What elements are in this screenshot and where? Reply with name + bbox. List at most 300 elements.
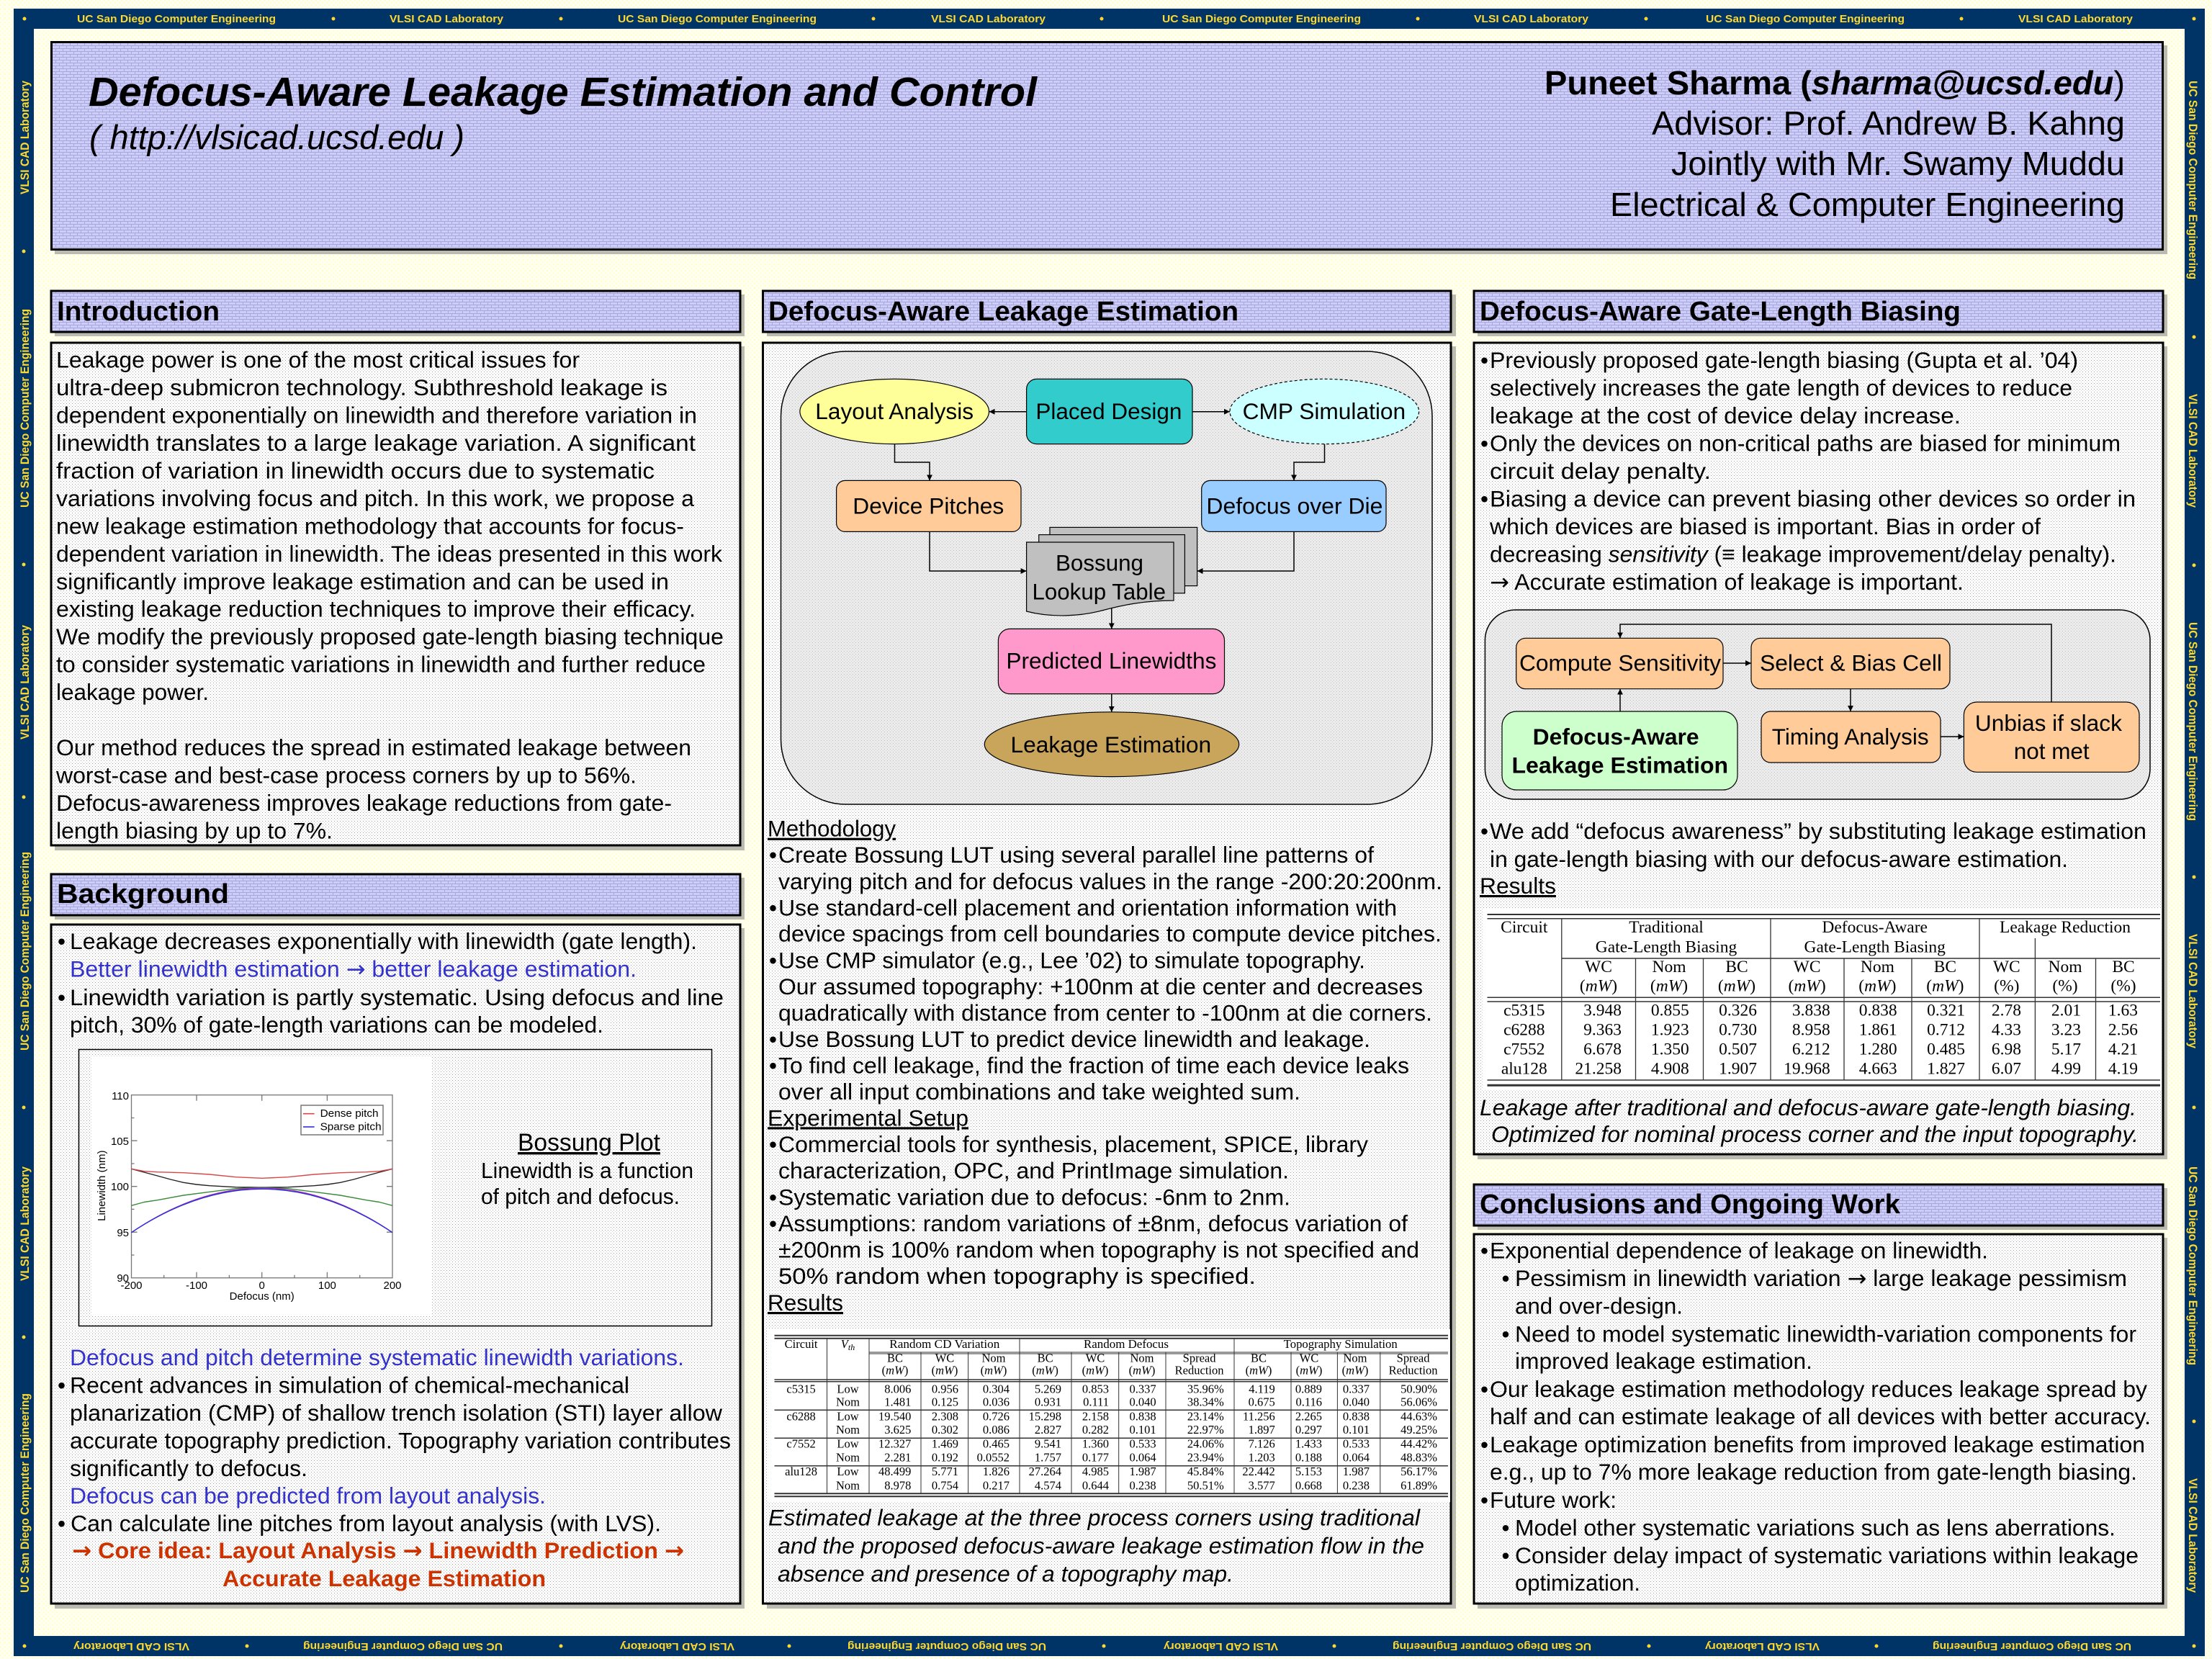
table: estimated leakage at process corners: (mW) <box>981 1363 1007 1377</box>
table: estimated leakage at process corners: Low <box>837 1437 859 1451</box>
table: estimated leakage at process corners: 3.577 <box>1249 1478 1275 1492</box>
table: estimated leakage at process corners: 22.97% <box>1187 1423 1224 1437</box>
flowchart: gate-length biasing loop <box>1485 610 2150 799</box>
panel: title banner <box>52 42 2167 254</box>
methodology text: Use CMP simulator (e.g., Lee ’02) to simulate topography. <box>778 947 1365 973</box>
experimental setup text: • <box>769 1210 777 1236</box>
table caption: Estimated leakage at the three process corners using traditional <box>768 1505 1421 1531</box>
table: estimated leakage at process corners: 0.0552 <box>977 1450 1010 1464</box>
left banner: UC San Diego Computer Engineering <box>18 852 32 1051</box>
plot tick labels: 110 <box>112 1090 129 1102</box>
right banner: VLSI CAD Laboratory <box>2186 1478 2200 1593</box>
biasing text <box>1480 347 2136 595</box>
experimental setup text: 50% random when topography is specified. <box>778 1263 1256 1289</box>
table: estimated leakage at process corners: Random Defocus <box>1084 1337 1169 1351</box>
flowchart: leakage estimation flow <box>781 351 1432 804</box>
panel: background text: Better linewidth estimation → better leakage estimation. <box>70 956 637 982</box>
table: leakage after gate-length biasing: 0.712 <box>1927 1021 1965 1040</box>
table caption: Optimized for nominal process corner and the input topography. <box>1491 1121 2139 1147</box>
panel: conclusions body: • <box>1480 1237 1488 1263</box>
biasing text: Only the devices on non-critical paths are biased for minimum <box>1490 431 2121 457</box>
table: estimated leakage at process corners: Spread <box>1183 1352 1216 1365</box>
right banner: UC San Diego Computer Engineering <box>2186 81 2200 279</box>
node: compute sensitivity <box>1516 638 1723 689</box>
defocus awareness text: • <box>1480 818 1488 844</box>
table: estimated leakage at process corners: BC <box>1251 1352 1267 1365</box>
biasing text: Biasing a device can prevent biasing other devices so order in <box>1490 485 2136 511</box>
table: estimated leakage at process corners: 2.281 <box>884 1450 911 1464</box>
table: estimated leakage at process corners: 0.188 <box>1295 1450 1322 1464</box>
table: estimated leakage at process corners: 0.282 <box>1082 1423 1109 1437</box>
author block: Puneet Sharma (sharma@ucsd.edu) <box>1545 64 2125 102</box>
table: estimated leakage at process corners: 9.541 <box>1035 1437 1061 1451</box>
panel: conclusions heading: Conclusions and Ongoing Work <box>1480 1190 1901 1220</box>
table: estimated leakage at process corners: 0.889 <box>1295 1382 1322 1395</box>
left banner: VLSI CAD Laboratory <box>18 1166 32 1281</box>
panel: background text: accurate topography prediction. Topography variation contributes <box>70 1427 731 1453</box>
biasing text: leakage at the cost of device delay increase. <box>1490 403 1961 428</box>
table: leakage after gate-length biasing: 3.838 <box>1792 1002 1830 1020</box>
table: estimated leakage at process corners: 8.006 <box>884 1382 911 1395</box>
table: estimated leakage at process corners: Random CD Variation <box>889 1337 999 1351</box>
experimental setup text: ±200nm is 100% random when topography is not specified and <box>778 1237 1419 1263</box>
panel: conclusions body: Need to model systematic linewidth-variation components for <box>1515 1321 2136 1346</box>
node: bossung lookup table: Lookup Table <box>1033 578 1166 604</box>
loop connectors <box>1620 624 2051 737</box>
plot tick labels: 90 <box>117 1272 129 1285</box>
table: leakage after gate-length biasing: alu128 <box>1501 1059 1547 1078</box>
table: estimated leakage at process corners: 0.217 <box>983 1478 1010 1492</box>
top banner: UC San Diego Computer Engineering <box>618 13 817 25</box>
table: estimated leakage at process corners: 23.14% <box>1187 1409 1224 1423</box>
table: estimated leakage at process corners: V <box>841 1337 848 1351</box>
panel: introduction text: dependent exponentially on linewidth and therefore variation in <box>56 402 697 428</box>
title: Defocus-Aware Leakage Estimation and Control <box>89 69 1038 115</box>
panel: background text: • <box>58 928 66 954</box>
table: estimated leakage at process corners: 3.625 <box>884 1423 911 1437</box>
table: estimated leakage at process corners: 56.06% <box>1401 1395 1437 1409</box>
table: estimated leakage at process corners: (mW) <box>1129 1363 1155 1377</box>
table: leakage after gate-length biasing: (mW) <box>1580 977 1617 996</box>
table: leakage after gate-length biasing: Nom <box>1652 958 1686 976</box>
panel: conclusions body: optimization. <box>1515 1570 1640 1596</box>
table: leakage after gate-length biasing: 1.827 <box>1927 1059 1965 1078</box>
table: estimated leakage at process corners: (mW) <box>1296 1363 1322 1377</box>
panel: background text: significantly to defocus. <box>70 1455 307 1481</box>
table: estimated leakage at process corners: 44.42% <box>1401 1437 1437 1451</box>
table: estimated leakage at process corners: 0.465 <box>983 1437 1010 1451</box>
panel: introduction text: length biasing by up to 7%. <box>56 818 333 844</box>
table: estimated leakage at process corners: 0.337 <box>1129 1382 1156 1395</box>
table: leakage after gate-length biasing: (%) <box>2110 977 2136 996</box>
top banner: VLSI CAD Laboratory <box>931 13 1046 25</box>
methodology text: Use standard-cell placement and orientation information with <box>778 895 1397 921</box>
table: estimated leakage at process corners: th <box>848 1342 855 1352</box>
table: leakage after gate-length biasing: 4.21 <box>2108 1040 2138 1059</box>
top banner <box>23 13 2196 25</box>
table: estimated leakage at process corners: 48.499 <box>878 1465 911 1478</box>
panel: introduction text: existing leakage reduction techniques to improve their efficacy. <box>56 596 696 622</box>
panel: introduction text: We modify the previously proposed gate-length biasing technique <box>56 624 724 649</box>
table: estimated leakage at process corners: 0.754 <box>932 1478 958 1492</box>
plot tick labels: 200 <box>383 1280 402 1292</box>
table: leakage after gate-length biasing: Nom <box>2048 958 2082 976</box>
methodology text: To find cell leakage, find the fraction of time each device leaks <box>778 1053 1409 1079</box>
results heading: Results <box>768 1290 843 1316</box>
node: timing analysis <box>1761 711 1941 763</box>
table: estimated leakage at process corners: 1.987 <box>1129 1465 1156 1478</box>
table: estimated leakage at process corners: 0.644 <box>1082 1478 1109 1492</box>
experimental setup text: • <box>769 1184 777 1210</box>
table: leakage after gate-length biasing: BC <box>1725 958 1748 976</box>
table: estimated leakage at process corners: (mW) <box>1246 1363 1272 1377</box>
methodology text <box>768 816 1442 1105</box>
table: leakage after gate-length biasing: Gate-Length Biasing <box>1596 938 1737 956</box>
table: leakage after gate-length biasing: (mW) <box>1858 977 1897 996</box>
node: unbias if slack not met: Unbias if slack <box>1975 710 2122 736</box>
biasing text: decreasing sensitivity (≡ leakage improvement/delay penalty). <box>1490 541 2116 567</box>
table: estimated leakage at process corners: Low <box>837 1465 859 1478</box>
experimental setup text: • <box>769 1131 777 1157</box>
table: leakage after gate-length biasing: c5315 <box>1503 1002 1545 1020</box>
bottom banner: VLSI CAD Laboratory <box>73 1640 189 1653</box>
panel: introduction text: fraction of variation in linewidth occurs due to systematic <box>56 457 655 483</box>
table: estimated leakage at process corners: Nom <box>836 1450 860 1464</box>
table: estimated leakage at process corners: 0.533 <box>1129 1437 1156 1451</box>
table: estimated leakage at process corners: 0.064 <box>1343 1450 1370 1464</box>
table: estimated leakage at process corners: 0.125 <box>932 1395 958 1409</box>
table: estimated leakage at process corners: 7.126 <box>1249 1437 1275 1451</box>
plot tick labels: 0 <box>259 1280 265 1292</box>
panel: conclusions heading <box>1474 1184 2167 1230</box>
table: estimated leakage at process corners: 49.25% <box>1401 1423 1437 1437</box>
table: leakage after gate-length biasing: Leakage Reduction <box>2000 918 2131 937</box>
left banner: VLSI CAD Laboratory <box>18 81 32 194</box>
methodology text: • <box>769 842 777 868</box>
table: estimated leakage at process corners: (mW) <box>882 1363 908 1377</box>
table: estimated leakage at process corners: 0.192 <box>932 1450 958 1464</box>
node: device pitches <box>837 480 1021 531</box>
table: estimated leakage at process corners: 0.302 <box>932 1423 958 1437</box>
panel: background text: • <box>58 984 66 1010</box>
table: estimated leakage at process corners: 0.838 <box>1129 1409 1156 1423</box>
node: unbias if slack not met <box>1964 702 2139 772</box>
plot legend: Sparse pitch <box>320 1120 382 1133</box>
table: estimated leakage at process corners: 0.297 <box>1295 1423 1322 1437</box>
table: leakage after gate-length biasing: BC <box>1934 958 1956 976</box>
table: estimated leakage at process corners: Topography Simulation <box>1284 1337 1398 1351</box>
panel: conclusions body: Future work: <box>1490 1487 1617 1513</box>
left banner: UC San Diego Computer Engineering <box>18 1393 32 1593</box>
node: bossung lookup table: Bossung <box>1056 550 1143 576</box>
table: estimated leakage at process corners: 0.116 <box>1295 1395 1322 1409</box>
table: estimated leakage at process corners: 5.269 <box>1035 1382 1061 1395</box>
table: estimated leakage at process corners: 50.90% <box>1401 1382 1437 1395</box>
table: estimated leakage at process corners: 0.064 <box>1129 1450 1156 1464</box>
table: leakage after gate-length biasing: 6.98 <box>1992 1040 2021 1059</box>
table: leakage after gate-length biasing: c6288 <box>1503 1021 1545 1040</box>
panel: background text: Can calculate line pitches from layout analysis (with LVS). <box>71 1511 661 1537</box>
node: unbias if slack not met: not met <box>2014 738 2090 764</box>
node: compute sensitivity: Compute Sensitivity <box>1519 650 1721 676</box>
table: estimated leakage at process corners: 2.827 <box>1035 1423 1061 1437</box>
node: leakage estimation <box>984 712 1239 777</box>
node: timing analysis: Timing Analysis <box>1772 724 1929 750</box>
table: leakage after gate-length biasing: 2.56 <box>2108 1021 2138 1040</box>
biasing text: circuit delay penalty. <box>1490 458 1711 484</box>
table: estimated leakage at process corners: 1.987 <box>1343 1465 1370 1478</box>
table: leakage after gate-length biasing: Circuit <box>1501 918 1548 937</box>
panel: background text: pitch, 30% of gate-length variations can be modeled. <box>70 1012 603 1038</box>
bottom banner: UC San Diego Computer Engineering <box>1933 1640 2131 1653</box>
panel: background text: • <box>58 1511 66 1537</box>
table: leakage after gate-length biasing: (mW) <box>1788 977 1826 996</box>
panel: introduction text: variations involving focus and pitch. In this work, we propose a <box>56 485 694 511</box>
panel: conclusions body: Exponential dependence of leakage on linewidth. <box>1490 1237 1988 1263</box>
defocus awareness text: in gate-length biasing with our defocus-aware estimation. <box>1490 846 2068 872</box>
panel: conclusions body: Our leakage estimation methodology reduces leakage spread by <box>1490 1376 2147 1402</box>
panel: conclusions body: e.g., up to 7% more leakage reduction from gate-length biasing. <box>1490 1459 2137 1485</box>
table: estimated leakage at process corners: 0.931 <box>1035 1395 1061 1409</box>
node: defocus-aware leakage estimation: Leakage Estimation <box>1512 752 1728 778</box>
table: leakage after gate-length biasing: 0.321 <box>1927 1002 1965 1020</box>
table: leakage after gate-length biasing: 0.730 <box>1719 1021 1757 1040</box>
biasing text: Previously proposed gate-length biasing (Gupta et al. ’04) <box>1490 347 2078 373</box>
table: estimated leakage at process corners: BC <box>887 1352 903 1365</box>
plot axes <box>131 1095 392 1278</box>
bottom banner <box>23 1640 2196 1653</box>
bottom banner: VLSI CAD Laboratory <box>1163 1640 1278 1653</box>
table: estimated leakage at process corners: 1.203 <box>1249 1450 1275 1464</box>
panel: introduction text: ultra-deep submicron technology. Subthreshold leakage is <box>56 374 667 400</box>
experimental setup text <box>768 1105 1419 1289</box>
panel: introduction text: significantly improve leakage estimation and can be used in <box>56 568 669 594</box>
experimental setup text: Experimental Setup <box>768 1105 968 1130</box>
panel: introduction text: Our method reduces the spread in estimated leakage between <box>56 734 691 760</box>
table: estimated leakage at process corners: 1.757 <box>1035 1450 1061 1464</box>
panel: introduction text: worst-case and best-case process corners by up to 56%. <box>55 762 637 788</box>
methodology text: Create Bossung LUT using several parallel line patterns of <box>778 842 1374 868</box>
plot tick labels: -200 <box>120 1280 143 1292</box>
biasing text: which devices are biased is important. Bias in order of <box>1489 513 2041 539</box>
table: estimated leakage at process corners: 15.298 <box>1029 1409 1061 1423</box>
left banner: VLSI CAD Laboratory <box>18 625 32 739</box>
bottom banner: UC San Diego Computer Engineering <box>848 1640 1046 1653</box>
table: leakage after gate-length biasing: 6.07 <box>1992 1059 2021 1078</box>
top banner: UC San Diego Computer Engineering <box>77 13 276 25</box>
table: estimated leakage at process corners: 5.153 <box>1295 1465 1322 1478</box>
table: estimated leakage at process corners: 50.51% <box>1187 1478 1224 1492</box>
table: leakage after gate-length biasing: WC <box>1585 958 1612 976</box>
methodology text: Methodology <box>768 816 896 842</box>
bottom banner: VLSI CAD Laboratory <box>1704 1640 1820 1653</box>
node: defocus-aware leakage estimation: Defocus-Aware <box>1533 724 1699 750</box>
left banner: UC San Diego Computer Engineering <box>18 309 32 508</box>
table: leakage after gate-length biasing: Nom <box>1861 958 1894 976</box>
author block: Advisor: Prof. Andrew B. Kahng <box>1652 104 2125 142</box>
panel: conclusions body: • <box>1480 1431 1488 1457</box>
right banner: VLSI CAD Laboratory <box>2186 934 2200 1048</box>
table: leakage after gate-length biasing: 5.17 <box>2051 1040 2081 1059</box>
node: defocus-aware leakage estimation <box>1502 711 1737 790</box>
table: estimated leakage at process corners: 0.956 <box>932 1382 958 1395</box>
table: leakage after gate-length biasing: 4.99 <box>2051 1059 2081 1078</box>
table: estimated leakage at process corners: 1.897 <box>1249 1423 1275 1437</box>
table: estimated leakage at process corners: Nom <box>1130 1352 1154 1365</box>
table: estimated leakage at process corners: Circuit <box>785 1337 818 1351</box>
table: leakage after gate-length biasing: 6.678 <box>1583 1040 1622 1059</box>
panel: conclusions body: • <box>1480 1376 1488 1402</box>
methodology text: • <box>769 895 777 921</box>
table: estimated leakage at process corners: 0.853 <box>1082 1382 1109 1395</box>
plot legend: Dense pitch <box>320 1107 379 1120</box>
panel: introduction text: Defocus-awareness improves leakage reductions from gate- <box>56 790 672 816</box>
table: estimated leakage at process corners: Spread <box>1397 1352 1430 1365</box>
table: estimated leakage at process corners: 0.238 <box>1129 1478 1156 1492</box>
panel: background text: planarization (CMP) of shallow trench isolation (STI) layer allow <box>70 1400 722 1426</box>
table: leakage after gate-length biasing: 19.968 <box>1784 1059 1830 1078</box>
table: estimated leakage at process corners: 11.256 <box>1243 1409 1275 1423</box>
table: estimated leakage at process corners: 0.177 <box>1082 1450 1109 1464</box>
table: estimated leakage at process corners <box>768 1329 1450 1502</box>
table: estimated leakage at process corners: 8.978 <box>884 1478 911 1492</box>
table: estimated leakage at process corners: 45.84% <box>1187 1465 1224 1478</box>
node: defocus over die: Defocus over Die <box>1206 493 1382 519</box>
table: estimated leakage at process corners: (mW) <box>1082 1363 1108 1377</box>
node: cmp simulation: CMP Simulation <box>1243 398 1406 424</box>
panel: background text: • <box>58 1372 66 1398</box>
plot tick labels: 95 <box>117 1227 129 1239</box>
methodology text: • <box>769 1053 777 1079</box>
top banner: VLSI CAD Laboratory <box>1474 13 1589 25</box>
node: bossung lookup table <box>1027 527 1197 616</box>
table: leakage after gate-length biasing: 0.838 <box>1859 1002 1897 1020</box>
panel: background text: Recent advances in simulation of chemical-mechanical <box>70 1372 629 1398</box>
panel: introduction text: dependent variation in linewidth. The ideas presented in this work <box>56 541 722 567</box>
top banner: UC San Diego Computer Engineering <box>1162 13 1361 25</box>
table: leakage after gate-length biasing: 1.63 <box>2108 1002 2138 1020</box>
table: leakage after gate-length biasing: 0.855 <box>1651 1002 1689 1020</box>
panel: conclusions body: • <box>1502 1265 1510 1291</box>
plot description: Bossung Plot <box>518 1129 661 1156</box>
flowchart connectors <box>894 412 1325 712</box>
node: defocus over die <box>1202 480 1386 531</box>
table: estimated leakage at process corners: Nom <box>1344 1352 1367 1365</box>
defocus awareness text <box>1480 818 2146 872</box>
node: predicted linewidths <box>998 629 1224 694</box>
panel: conclusions body: • <box>1502 1321 1510 1346</box>
panel: defocus-aware leakage estimation heading: Defocus-Aware Leakage Estimation <box>768 297 1238 327</box>
panel: conclusions body: • <box>1502 1542 1510 1568</box>
panel: conclusions body: Leakage optimization benefits from improved leakage estimation <box>1490 1431 2145 1457</box>
panel: conclusions body: Pessimism in linewidth variation → large leakage pessimism <box>1515 1265 2127 1292</box>
table: estimated leakage at process corners: Reduction <box>1175 1363 1224 1377</box>
table: leakage after gate-length biasing: 21.258 <box>1575 1059 1622 1078</box>
table: estimated leakage at process corners: alu128 <box>785 1465 817 1478</box>
table: estimated leakage at process corners: 1.481 <box>884 1395 911 1409</box>
panel: background text: Accurate Leakage Estimation <box>222 1565 546 1591</box>
table: leakage after gate-length biasing: 0.326 <box>1719 1002 1757 1020</box>
node: select and bias cell <box>1751 638 1950 689</box>
table: estimated leakage at process corners: (mW) <box>1342 1363 1368 1377</box>
table: leakage after gate-length biasing: 1.350 <box>1651 1040 1689 1059</box>
node: cmp simulation <box>1230 379 1419 444</box>
table: estimated leakage at process corners: Low <box>837 1382 859 1395</box>
right banner: UC San Diego Computer Engineering <box>2186 622 2200 821</box>
table caption: and the proposed defocus-aware leakage estimation flow in the <box>778 1532 1424 1558</box>
table: estimated leakage at process corners: 1.360 <box>1082 1437 1109 1451</box>
panel: background text: Defocus can be predicted from layout analysis. <box>70 1483 546 1509</box>
panel: background heading: Background <box>57 879 229 909</box>
table: leakage after gate-length biasing: Traditional <box>1629 918 1704 937</box>
table: estimated leakage at process corners: Low <box>837 1409 859 1423</box>
plot description: of pitch and defocus. <box>481 1184 680 1209</box>
bottom banner: UC San Diego Computer Engineering <box>303 1640 503 1653</box>
table: estimated leakage at process corners: 5.771 <box>932 1465 958 1478</box>
experimental setup text: Systematic variation due to defocus: -6nm to 2nm. <box>778 1184 1290 1210</box>
right banner: VLSI CAD Laboratory <box>2186 394 2200 508</box>
table: estimated leakage at process corners: 1.826 <box>983 1465 1010 1478</box>
results heading: Results <box>1480 873 1556 899</box>
node: select and bias cell: Select & Bias Cell <box>1760 650 1942 676</box>
table: leakage after gate-length biasing: 0.485 <box>1927 1040 1965 1059</box>
table: leakage after gate-length biasing: (%) <box>1994 977 2019 996</box>
table: leakage after gate-length biasing: (mW) <box>1926 977 1964 996</box>
table: estimated leakage at process corners: 27.264 <box>1029 1465 1061 1478</box>
panel: introduction text: linewidth translates to a large leakage variation. A significant <box>56 430 696 456</box>
table: leakage after gate-length biasing: 1.923 <box>1651 1021 1689 1040</box>
table: estimated leakage at process corners: WC <box>935 1352 954 1365</box>
table: estimated leakage at process corners: 22.442 <box>1242 1465 1275 1478</box>
methodology text: • <box>769 1026 777 1052</box>
panel: introduction text <box>51 343 745 850</box>
table: estimated leakage at process corners: 38.34% <box>1187 1395 1224 1409</box>
defocus awareness text: We add “defocus awareness” by substituting leakage estimation <box>1490 818 2146 844</box>
table: leakage after gate-length biasing: 3.948 <box>1583 1002 1622 1020</box>
table: estimated leakage at process corners: 0.533 <box>1343 1437 1370 1451</box>
plot description <box>481 1129 693 1209</box>
left banner <box>18 81 32 1593</box>
panel: conclusions body: improved leakage estimation. <box>1515 1348 1812 1374</box>
table: leakage after gate-length biasing: WC <box>1794 958 1821 976</box>
table: estimated leakage at process corners: Nom <box>836 1478 860 1492</box>
table: estimated leakage at process corners: 2.308 <box>932 1409 958 1423</box>
table: estimated leakage at process corners: 12.327 <box>878 1437 911 1451</box>
table: estimated leakage at process corners: 48.83% <box>1401 1450 1437 1464</box>
node: placed design: Placed Design <box>1035 398 1182 424</box>
table: estimated leakage at process corners: 0.304 <box>983 1382 1010 1395</box>
panel: gate-length biasing body <box>1474 343 2167 1159</box>
table caption: absence and presence of a topography map. <box>778 1561 1233 1587</box>
panel: introduction text: Leakage power is one of the most critical issues for <box>56 347 580 373</box>
table: estimated leakage at process corners: Nom <box>836 1423 860 1437</box>
methodology text: Our assumed topography: +100nm at die center and decreases <box>778 974 1423 999</box>
plot tick labels: Linewidth (nm) <box>96 1151 108 1221</box>
table: estimated leakage at process corners: c6288 <box>786 1409 816 1423</box>
table: estimated leakage at process corners: 61.89% <box>1401 1478 1437 1492</box>
right banner <box>2186 81 2200 1593</box>
plot tick labels: -100 <box>186 1280 207 1292</box>
panel: introduction text: to consider systematic variations in linewidth and further reduce <box>56 651 706 677</box>
table: estimated leakage at process corners: 0.838 <box>1343 1409 1370 1423</box>
table: estimated leakage at process corners: 4.574 <box>1035 1478 1061 1492</box>
panel: introduction heading: Introduction <box>57 297 220 327</box>
table: estimated leakage at process corners: 0.111 <box>1083 1395 1109 1409</box>
node: placed design <box>1027 379 1192 444</box>
table: leakage after gate-length biasing: WC <box>1993 958 2020 976</box>
table: estimated leakage at process corners: 0.040 <box>1343 1395 1370 1409</box>
panel: background text: → Core idea: Layout Analysis → Linewidth Prediction → <box>72 1537 684 1564</box>
